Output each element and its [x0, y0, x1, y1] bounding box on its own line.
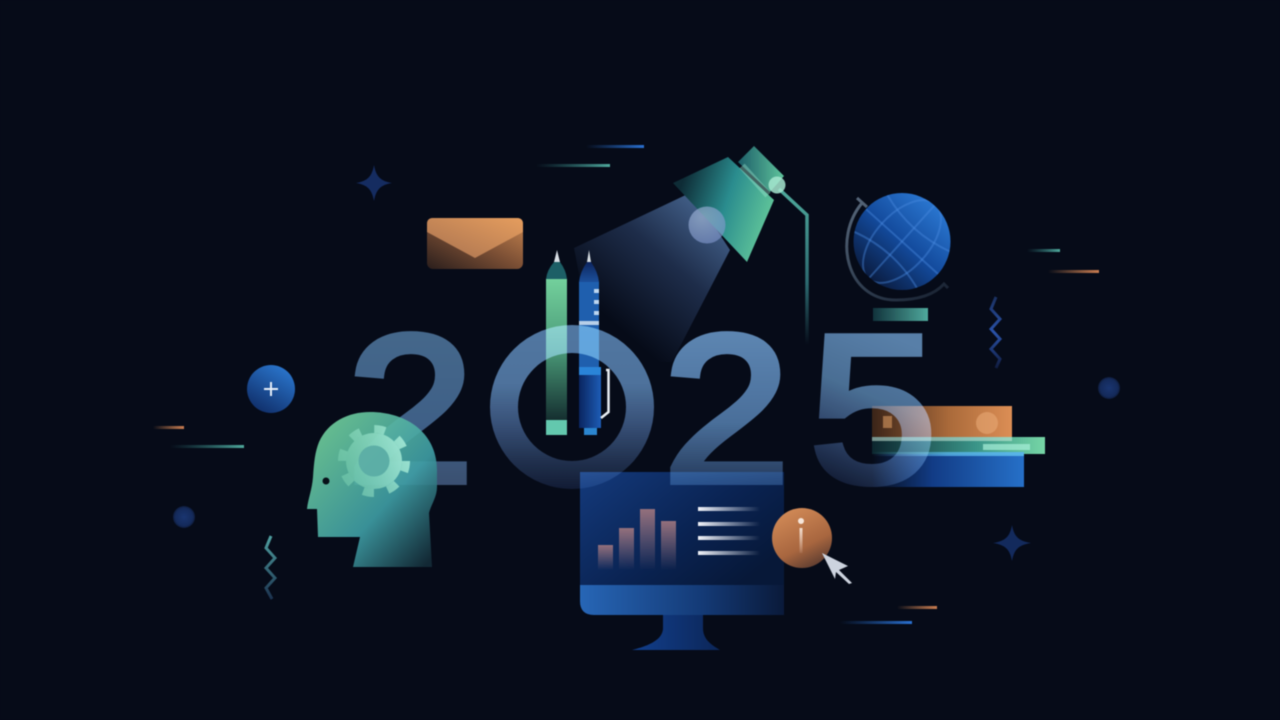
illustration: 2025 themed scene: [154, 144, 1120, 651]
globe grid lines: [854, 195, 950, 288]
pen clip: [601, 370, 608, 418]
number 2025: [347, 293, 937, 526]
year text: 2: [663, 293, 790, 526]
pen: [579, 250, 608, 435]
decorative dot: left: [173, 506, 195, 528]
lamp back cap: [738, 146, 784, 192]
lamp shade: [673, 157, 774, 262]
monitor bottom strip: [580, 585, 784, 615]
highlight strip: [742, 166, 768, 195]
zigzag: left: [266, 536, 275, 599]
eye: [322, 478, 330, 484]
text lines: [698, 507, 760, 555]
icon: gear: [342, 429, 406, 493]
year text: 2: [347, 293, 474, 526]
bar chart: [598, 509, 676, 570]
stack of books: [872, 406, 1045, 487]
lamp arm: [779, 189, 807, 345]
bulb: [688, 206, 726, 244]
light beam: [574, 192, 730, 362]
green book: [872, 437, 1045, 454]
globe stand arc: [847, 198, 948, 300]
cursor arrow: [822, 553, 852, 584]
orange book: [872, 406, 1012, 438]
year text: 5: [810, 293, 937, 526]
monitor screen: [580, 472, 784, 585]
blue book: [872, 452, 1024, 487]
ring shape of the zero: [504, 339, 640, 475]
info button: [772, 508, 832, 568]
head with gear: [307, 412, 437, 567]
speed lines: [153, 145, 1099, 624]
pencil: [546, 250, 567, 435]
joint: [768, 176, 786, 194]
globe: [844, 192, 952, 322]
monitor: [580, 472, 784, 650]
decorative star: bottom right: [993, 525, 1031, 561]
stand bar: [873, 308, 928, 321]
plus button: [247, 365, 295, 413]
envelope: [427, 218, 523, 269]
decorative star: top left: [356, 165, 392, 201]
monitor stand: [632, 612, 720, 650]
decorative dot: right: [1098, 377, 1120, 399]
lamp: [673, 146, 807, 345]
zigzag: right: [991, 297, 1000, 368]
